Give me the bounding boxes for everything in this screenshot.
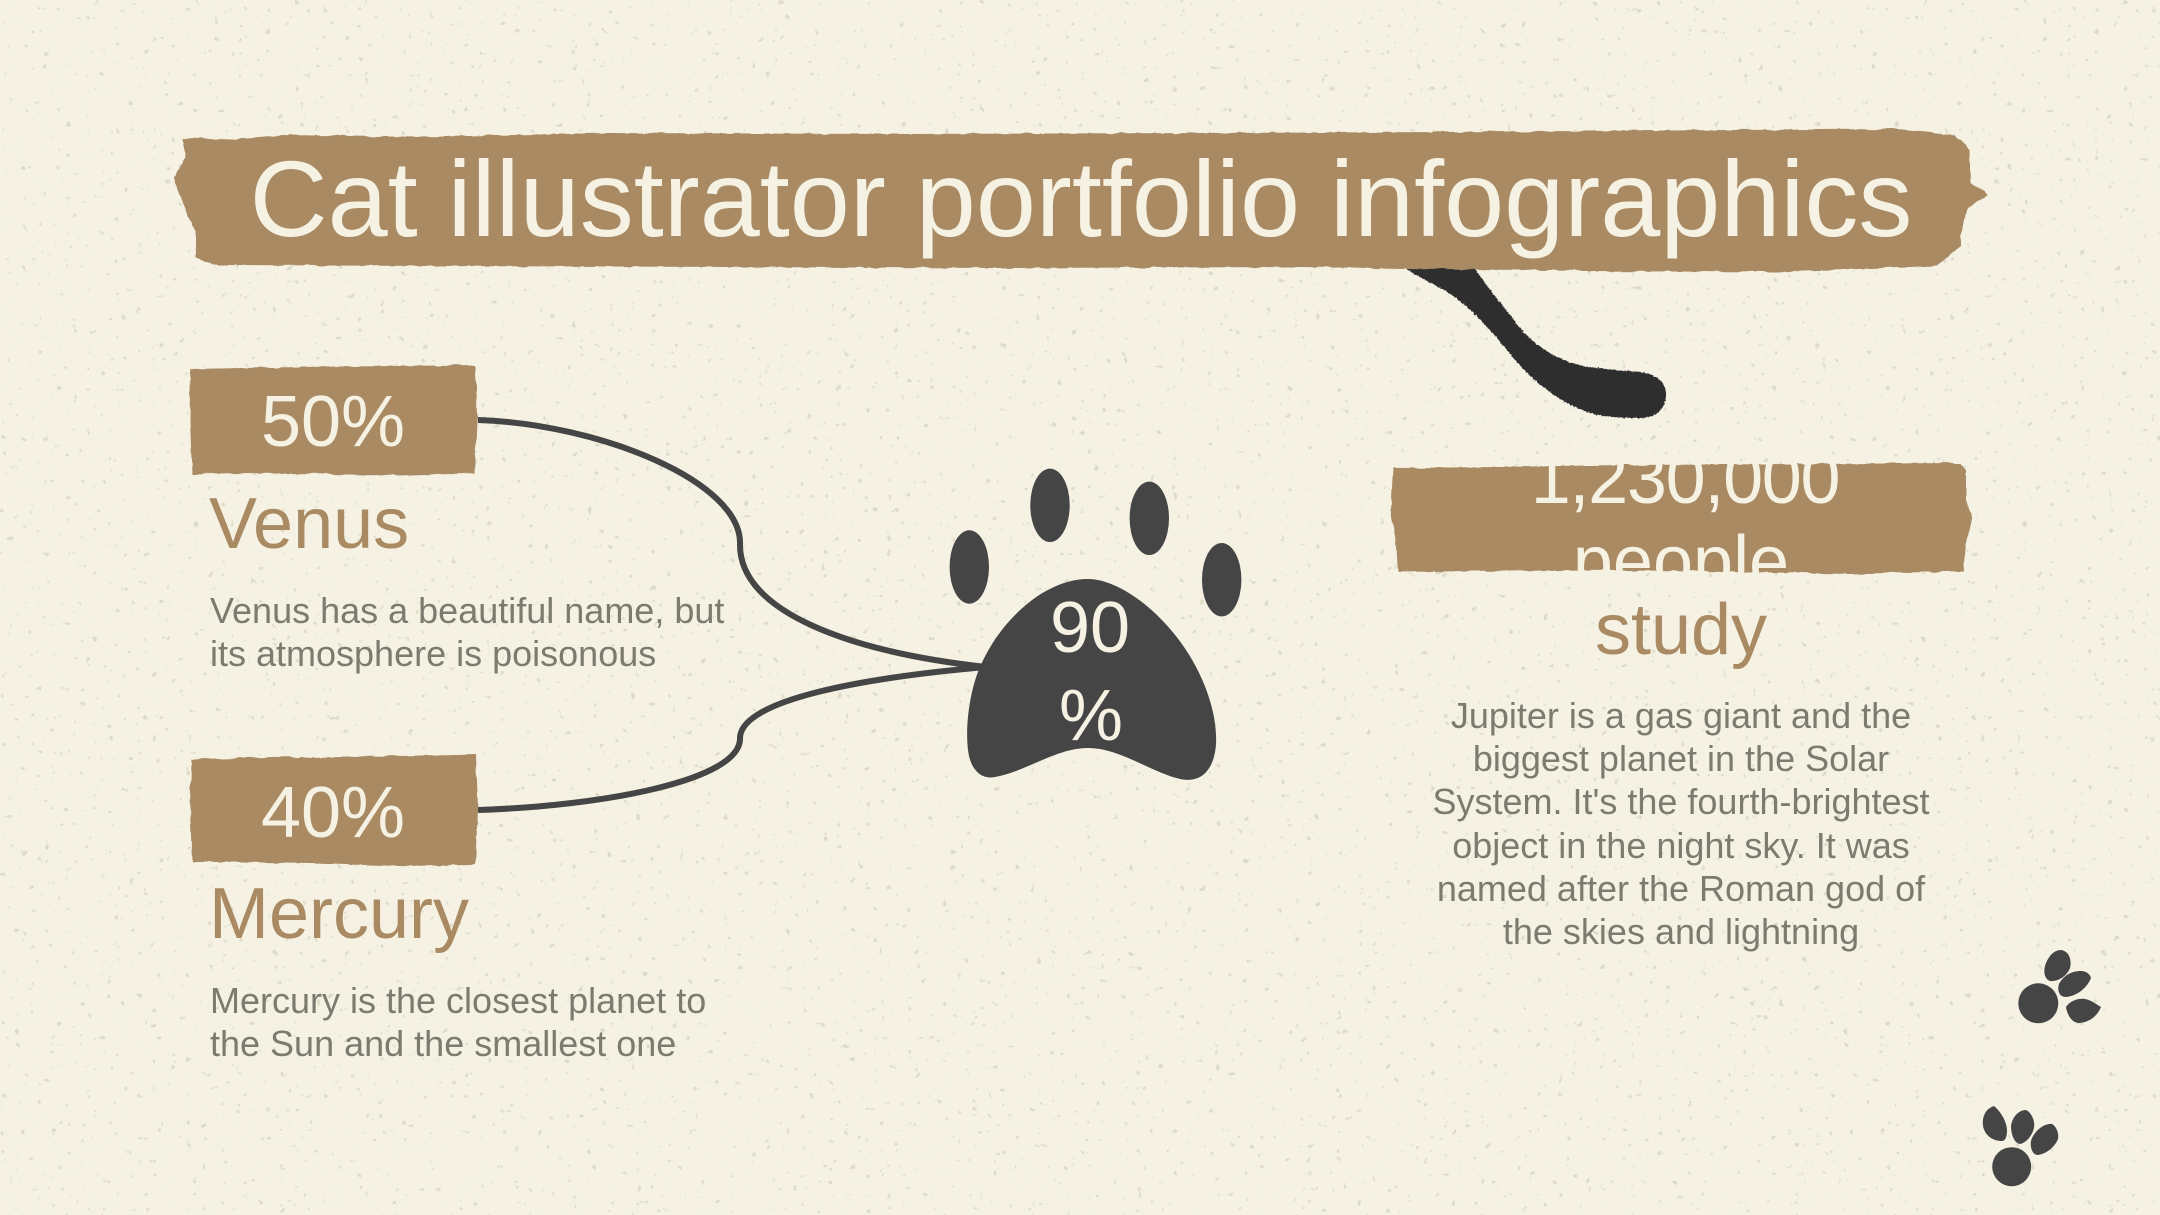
Venus heading: Venus xyxy=(209,484,409,564)
study description: biggest planet in the Solar xyxy=(1473,738,1889,779)
study value band xyxy=(1391,463,1972,574)
Venus description: its atmosphere is poisonous xyxy=(210,633,656,674)
Mercury description: Mercury is the closest planet to xyxy=(210,980,706,1021)
icon: upper paw print xyxy=(2018,950,2101,1023)
Venus description: Venus has a beautiful name, but xyxy=(210,590,724,631)
panel: Mercury xyxy=(190,754,706,1064)
Mercury heading: Mercury xyxy=(209,874,469,954)
Mercury value: 40% xyxy=(261,773,405,853)
Mercury description: the Sun and the smallest one xyxy=(210,1023,676,1064)
study value: 1,230,000 xyxy=(1531,439,1839,519)
title banner xyxy=(173,129,1989,272)
study value: people xyxy=(1573,522,1789,602)
paw toes xyxy=(950,469,1241,616)
study description: the skies and lightning xyxy=(1503,911,1859,952)
cat tail xyxy=(1400,264,1666,418)
Mercury value band xyxy=(190,754,478,866)
icon: lower paw print xyxy=(1983,1106,2058,1186)
connector line: Mercury to paw xyxy=(478,667,986,810)
title text: Cat illustrator portfolio infographics xyxy=(250,138,1912,259)
study description: Jupiter is a gas giant and the xyxy=(1451,695,1911,736)
paw pad xyxy=(967,579,1216,780)
paw value: 90 xyxy=(1050,588,1130,668)
study description: object in the night sky. It was xyxy=(1452,825,1910,866)
title torn band xyxy=(173,129,1989,272)
paw value: % xyxy=(1059,676,1123,756)
panel: Jupiter study xyxy=(1391,439,1972,952)
central paw with 90% xyxy=(950,469,1241,780)
panel: Venus xyxy=(190,365,724,674)
Venus value band xyxy=(190,365,477,476)
study description: named after the Roman god of xyxy=(1437,868,1926,909)
connector line: Venus to paw xyxy=(478,420,986,667)
Venus value: 50% xyxy=(261,382,405,462)
study heading: study xyxy=(1595,590,1767,670)
study description: System. It's the fourth-brightest xyxy=(1432,781,1930,822)
